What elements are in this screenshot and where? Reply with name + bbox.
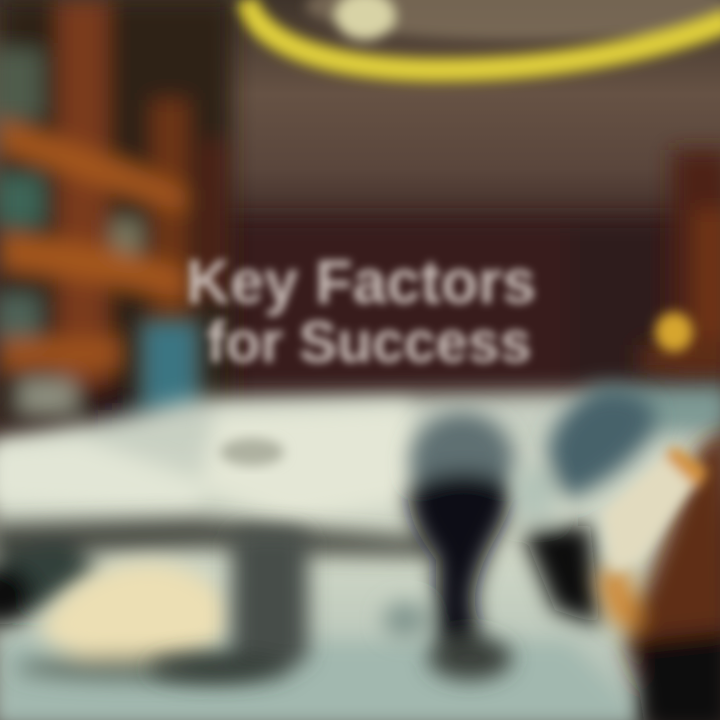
dark desk shadow band xyxy=(0,518,430,625)
teal object beside shelves xyxy=(105,320,200,438)
ceiling xyxy=(0,0,720,235)
grey cup xyxy=(148,530,308,683)
papers on desk xyxy=(0,404,420,522)
ceiling light: yellow ring xyxy=(245,0,720,70)
title: Key Factors xyxy=(186,248,536,317)
desk surface xyxy=(0,385,720,720)
title: for Success xyxy=(206,310,532,375)
dark figure in centre xyxy=(383,412,514,680)
bookshelves left xyxy=(0,0,232,435)
back wall xyxy=(215,218,705,393)
title xyxy=(186,248,536,375)
white paper on chair xyxy=(603,446,708,572)
right cabinet and lamp xyxy=(640,150,720,380)
cream paper foreground xyxy=(15,563,265,681)
teal figure right xyxy=(515,390,655,625)
orange chair xyxy=(596,430,720,720)
